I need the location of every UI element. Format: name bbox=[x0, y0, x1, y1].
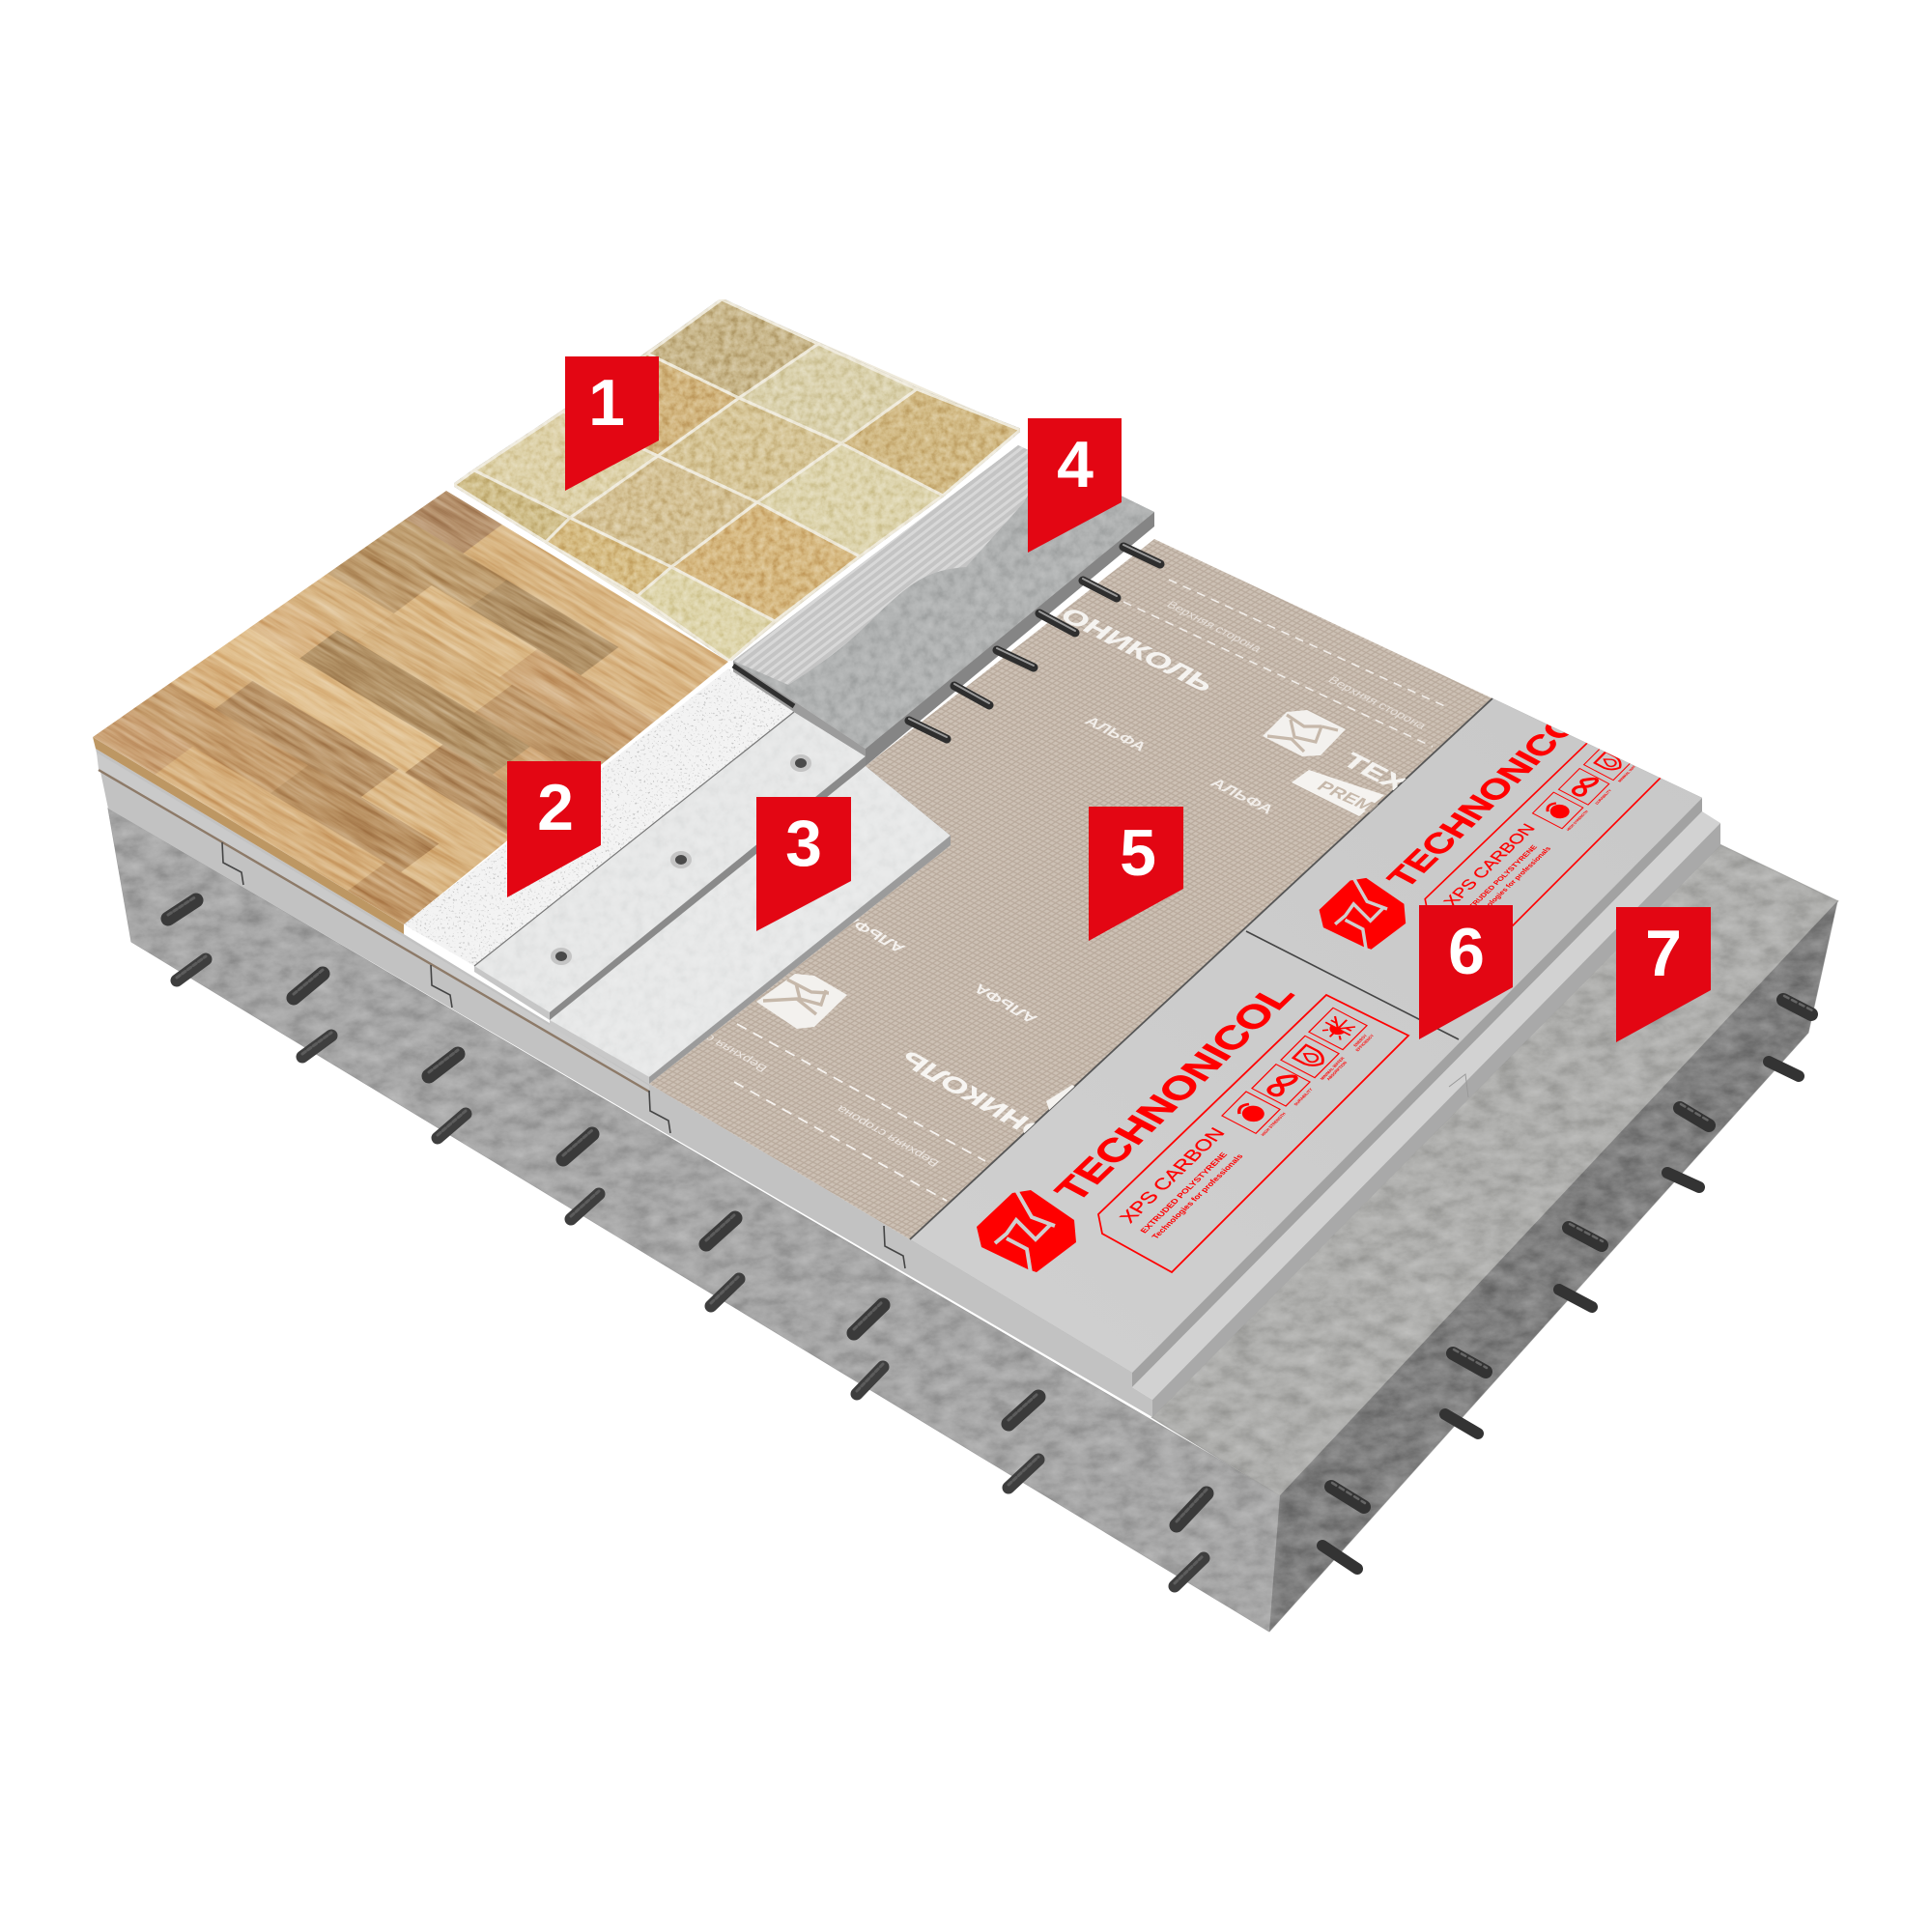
screed shadow line bbox=[733, 666, 794, 706]
product name: XPS CARBON bbox=[1116, 1125, 1230, 1226]
panel A top bbox=[474, 712, 866, 1012]
marker 1: 1 bbox=[588, 366, 625, 440]
row 2 bbox=[168, 652, 549, 887]
dashed lines: back bbox=[1123, 580, 1449, 747]
membrane surface bbox=[649, 539, 1492, 1239]
panel B front side bbox=[550, 1020, 649, 1084]
icon: durability: DURABILITY bbox=[1293, 1088, 1314, 1106]
combed adhesive bbox=[733, 445, 1048, 685]
ceramic tile floor bbox=[454, 299, 1020, 661]
marker 5 bbox=[1089, 807, 1183, 941]
marker 6 bbox=[1419, 905, 1513, 1039]
screed right side bbox=[866, 512, 1154, 766]
side marking: back 1: Верхняя сторона bbox=[1164, 599, 1265, 654]
white tag: back bbox=[1292, 770, 1411, 830]
row 6 bbox=[319, 540, 699, 775]
concrete right face bbox=[1269, 901, 1837, 1632]
thermal insulation underlay bbox=[404, 668, 794, 966]
marker 2: 2 bbox=[537, 771, 574, 844]
XPS branding: back board bbox=[1320, 724, 1662, 950]
screed and tile adhesive bbox=[733, 445, 1154, 766]
thin underlayment line bbox=[99, 770, 649, 1092]
concrete top face bbox=[1152, 845, 1837, 1495]
icon: durability, back board bbox=[1557, 767, 1611, 806]
XPS board top surface bbox=[910, 698, 1702, 1373]
side marking: front 1: Верхняя сторона bbox=[833, 1103, 942, 1169]
membrane brand text: back second: ТЕХНОНИКОЛЬ bbox=[1337, 749, 1580, 882]
tagline: back board: Technologies for professionals bbox=[1469, 845, 1552, 922]
brand name: TECHNONICOL bbox=[1045, 978, 1303, 1208]
product name: front 1: АЛЬФА bbox=[970, 981, 1041, 1026]
product name: front 2: АЛЬФА bbox=[839, 912, 909, 955]
row 0 bbox=[93, 709, 473, 943]
rebar ends: front face bbox=[168, 896, 1207, 1586]
icon: strength: HIGH STRENGTH bbox=[1260, 1112, 1287, 1137]
icon: strength, back board: HIGH STRENGTH bbox=[1566, 810, 1589, 832]
product box: back board bbox=[1424, 743, 1662, 927]
row 1 bbox=[130, 681, 511, 915]
marker 7 bbox=[1616, 907, 1711, 1042]
parquet flooring bbox=[93, 457, 811, 943]
screed front side bbox=[733, 661, 866, 766]
concrete slab bbox=[108, 809, 1837, 1632]
icon: strength bbox=[1222, 1092, 1288, 1137]
row 3 bbox=[206, 624, 586, 859]
icon: water absorption: MINIMAL WATER bbox=[1319, 1056, 1346, 1081]
marker 7: 7 bbox=[1645, 917, 1682, 990]
membrane printing bbox=[661, 564, 1580, 1201]
marker 6: 6 bbox=[1448, 915, 1485, 988]
tagline: Technologies for professionals bbox=[1150, 1152, 1245, 1240]
white logo: back bbox=[1263, 710, 1346, 756]
side marking: front 2: Верхняя сторона bbox=[661, 1009, 770, 1074]
panel B top bbox=[550, 766, 951, 1077]
product box bbox=[1098, 995, 1408, 1272]
rebar ends: right face bbox=[1322, 996, 1812, 1569]
membrane brand text: front: ТЕХНОНИКОЛЬ bbox=[895, 1046, 1133, 1190]
joint lines bbox=[222, 842, 905, 1268]
XPS lower board edge bbox=[1132, 798, 1720, 1417]
white tag: front bbox=[1046, 1085, 1082, 1121]
screed rods bbox=[909, 545, 1160, 739]
product type: back board: EXTRUDED POLYSTYRENE bbox=[1460, 843, 1539, 917]
panel B right side bbox=[649, 836, 951, 1084]
panel A right side bbox=[550, 756, 866, 1020]
icon: durability bbox=[1252, 1065, 1318, 1110]
row 5 bbox=[281, 568, 662, 803]
icon: energy efficiency: ENERGY bbox=[1352, 1034, 1369, 1047]
panel A with screws bbox=[474, 712, 866, 1020]
screw 1 bbox=[790, 754, 811, 772]
tiles bbox=[454, 299, 1020, 661]
marker 3: 3 bbox=[785, 807, 822, 880]
dashed lines: front bbox=[734, 1024, 985, 1201]
icon: water absorption, back board: MINIMAL WATER bbox=[1617, 761, 1640, 782]
row 4 bbox=[243, 596, 624, 831]
marker 4: 4 bbox=[1057, 428, 1094, 501]
marker 2 bbox=[507, 761, 601, 897]
floor structure diagram bbox=[93, 299, 1839, 1633]
icon: durability, back board: DURABILITY bbox=[1595, 788, 1613, 805]
icon: water absorption bbox=[1281, 1036, 1351, 1084]
brand name: back board: TECHNONICOL bbox=[1379, 693, 1604, 894]
marker 3 bbox=[756, 797, 851, 931]
icon: strength, back board bbox=[1533, 792, 1590, 832]
screw 2 bbox=[670, 851, 692, 868]
screw 3 bbox=[551, 948, 572, 965]
parquet side edge bbox=[93, 737, 404, 934]
gray layer edge along the front bbox=[96, 749, 1152, 1417]
membrane layer bbox=[649, 539, 1580, 1239]
logo: back board bbox=[1320, 878, 1406, 951]
board seam bbox=[1246, 931, 1459, 1039]
product name: back 2: АЛЬФА bbox=[1207, 776, 1278, 816]
marker 5: 5 bbox=[1120, 816, 1156, 890]
membrane board edge bbox=[910, 698, 1492, 1239]
membrane brand text: back: ТЕХНОНИКОЛЬ bbox=[977, 564, 1220, 696]
panel B bbox=[550, 766, 951, 1084]
product name: back board: XPS CARBON bbox=[1439, 821, 1539, 909]
side marking: back 2: Верхняя сторона bbox=[1325, 674, 1431, 731]
row 7 bbox=[357, 512, 737, 747]
white logo: front bbox=[756, 974, 847, 1029]
icon: water absorption: ABSORPTION bbox=[1325, 1061, 1349, 1081]
tag text: PREMIUM bbox=[1313, 779, 1411, 830]
screed top bbox=[733, 445, 1154, 749]
product type: EXTRUDED POLYSTYRENE bbox=[1138, 1151, 1230, 1235]
row 8 bbox=[395, 457, 811, 719]
panel A front side bbox=[474, 966, 550, 1020]
concrete front face bbox=[108, 809, 1280, 1632]
product name: back 1: АЛЬФА bbox=[1081, 714, 1151, 754]
logo: front board bbox=[977, 1190, 1076, 1273]
marker 4 bbox=[1028, 418, 1122, 553]
grout base bbox=[454, 299, 1020, 661]
icon: water absorption, back board bbox=[1582, 749, 1635, 782]
icon: energy efficiency bbox=[1309, 1008, 1379, 1056]
marker 1 bbox=[565, 356, 659, 491]
icon: energy efficiency: EFFICIENCY bbox=[1354, 1034, 1376, 1052]
XPS branding: front board bbox=[977, 978, 1408, 1273]
